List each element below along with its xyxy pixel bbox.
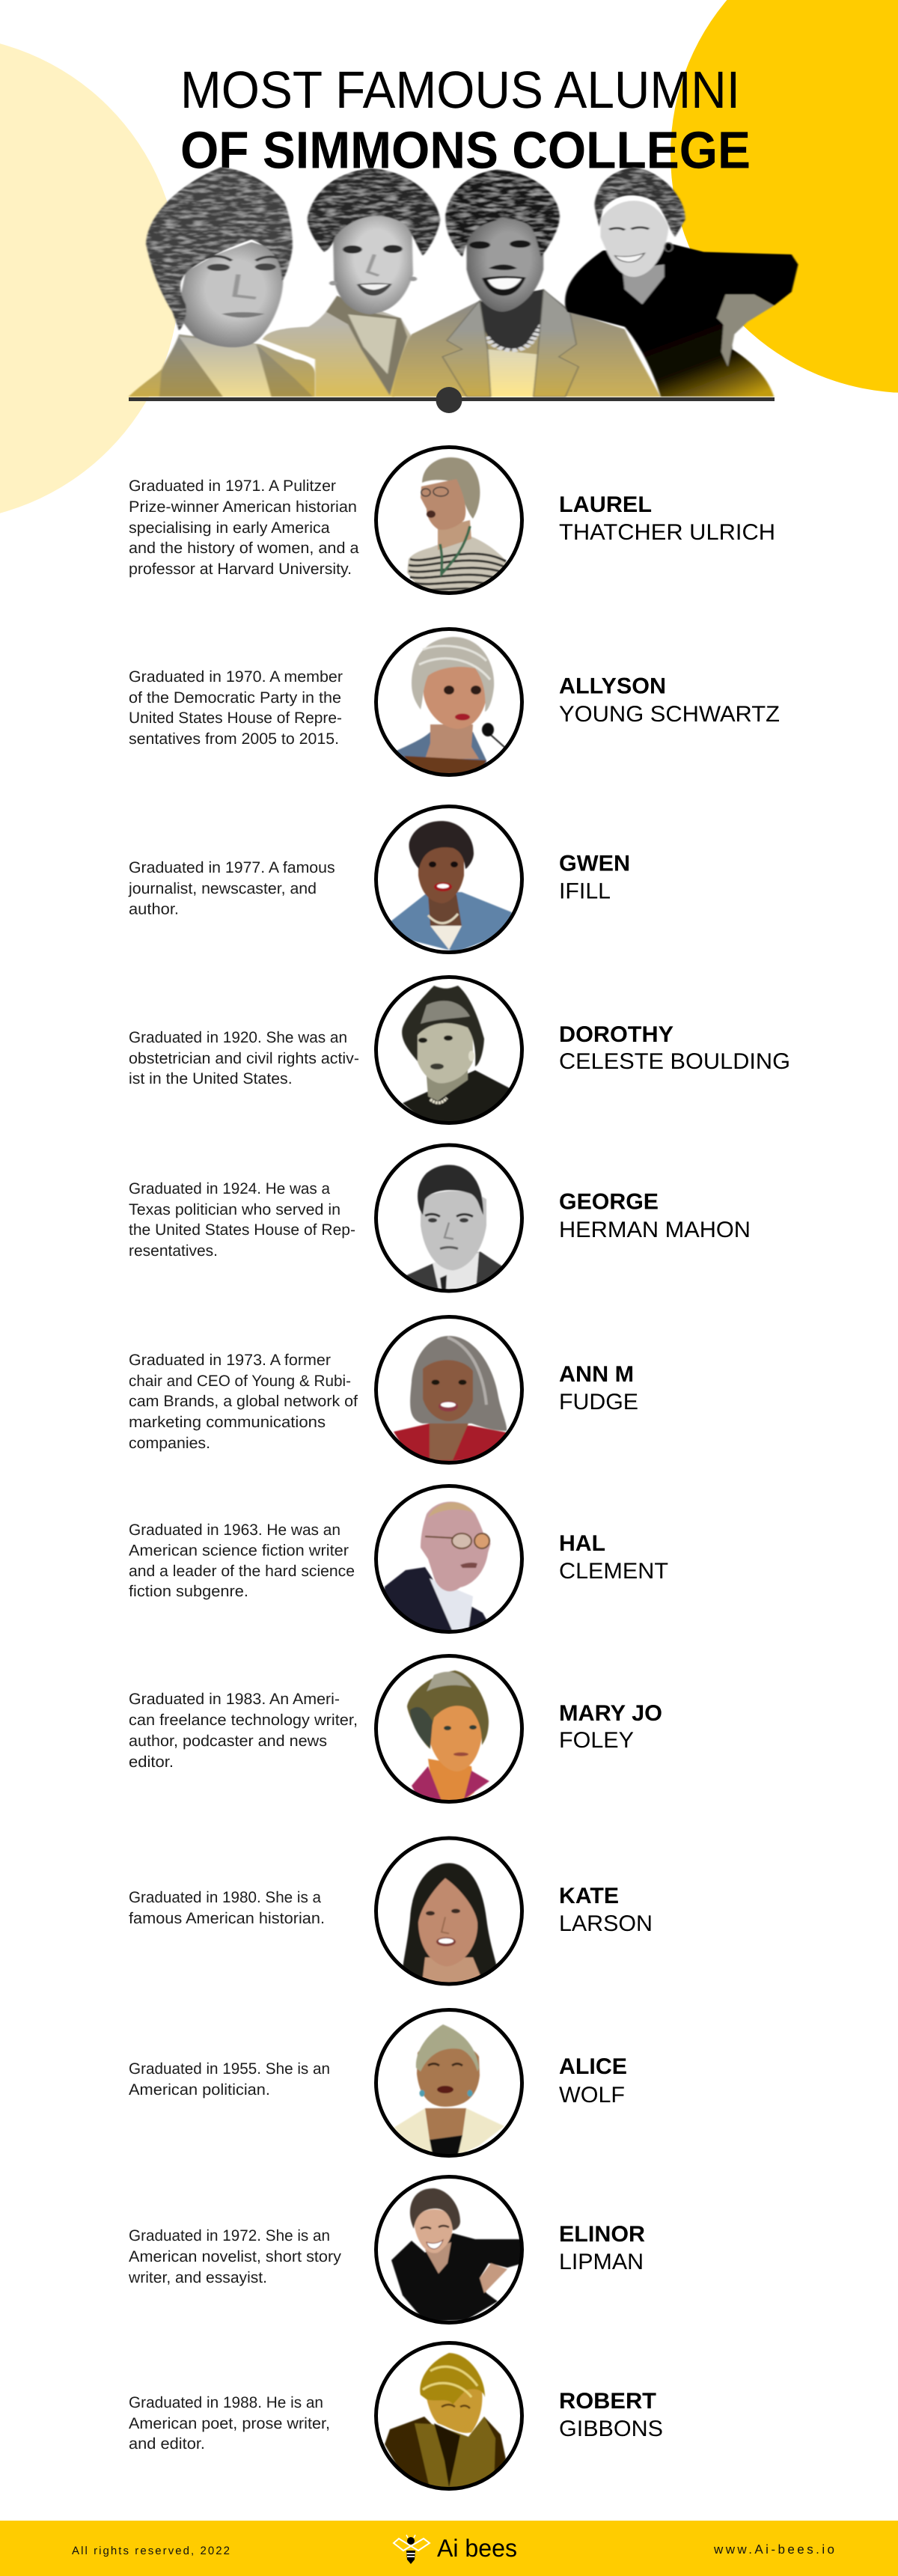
name: MARY JO bbox=[559, 1701, 662, 1726]
description bbox=[129, 2394, 330, 2453]
description bbox=[129, 477, 359, 578]
name bbox=[559, 852, 630, 904]
description: obstetrician and civil rights activ- bbox=[129, 1050, 359, 1067]
name bbox=[559, 2389, 663, 2441]
row: Dorothy Celeste Boulding bbox=[129, 977, 790, 1123]
portrait bbox=[376, 977, 522, 1123]
name bbox=[559, 1022, 790, 1074]
name: ROBERT bbox=[559, 2389, 656, 2414]
description: and editor. bbox=[129, 2435, 205, 2453]
hero baseline rule bbox=[129, 397, 775, 401]
row: Laurel Thatcher Ulrich bbox=[129, 448, 775, 593]
description: and a leader of the hard science bbox=[129, 1563, 355, 1580]
description: Graduated in 1973. A former bbox=[129, 1352, 331, 1369]
name: ELINOR bbox=[559, 2222, 645, 2247]
description: Graduated in 1988. He is an bbox=[129, 2394, 323, 2411]
title: MOST FAMOUS ALUMNI bbox=[180, 61, 740, 119]
description: Graduated in 1972. She is an bbox=[129, 2227, 330, 2244]
description: Texas politician who served in bbox=[129, 1201, 340, 1218]
description: Graduated in 1924. He was a bbox=[129, 1180, 330, 1197]
description: famous American historian. bbox=[129, 1910, 325, 1927]
name: ALICE bbox=[559, 2054, 627, 2079]
portrait bbox=[376, 807, 522, 952]
name: ANN M bbox=[559, 1362, 634, 1387]
description: Graduated in 1983. An Ameri- bbox=[129, 1691, 340, 1708]
name bbox=[559, 674, 780, 727]
description: chair and CEO of Young & Rubi- bbox=[129, 1373, 351, 1390]
name: KATE bbox=[559, 1884, 619, 1908]
description bbox=[129, 668, 343, 748]
description: author, podcaster and news bbox=[129, 1733, 327, 1750]
footer bbox=[0, 2521, 898, 2576]
name: HAL bbox=[559, 1531, 605, 1556]
description bbox=[129, 1889, 325, 1927]
description: Graduated in 1920. She was an bbox=[129, 1029, 347, 1046]
name: YOUNG SCHWARTZ bbox=[559, 702, 780, 727]
portrait bbox=[376, 2176, 523, 2323]
hero portrait: second woman bbox=[263, 168, 440, 397]
portrait bbox=[376, 448, 522, 593]
hero baseline dot bbox=[436, 387, 462, 413]
description: United States House of Repre- bbox=[129, 709, 342, 727]
description: author. bbox=[129, 901, 179, 918]
name: WOLF bbox=[559, 2083, 625, 2108]
portrait bbox=[376, 629, 522, 775]
description: journalist, newscaster, and bbox=[128, 880, 317, 897]
name: CELESTE BOULDING bbox=[559, 1049, 790, 1074]
name: FOLEY bbox=[559, 1728, 634, 1753]
description: the United States House of Rep- bbox=[129, 1221, 355, 1239]
row: Gwen Ifill bbox=[128, 807, 630, 952]
portrait bbox=[376, 1655, 522, 1802]
name: GWEN bbox=[559, 852, 630, 876]
name: LARSON bbox=[559, 1911, 653, 1936]
name: CLEMENT bbox=[559, 1559, 668, 1584]
icon: bee logo bbox=[394, 2535, 430, 2564]
logo wordmark: Ai bees bbox=[437, 2534, 517, 2562]
row: Ann M Fudge bbox=[129, 1317, 638, 1462]
row: Robert Gibbons bbox=[129, 2342, 663, 2489]
description: Graduated in 1970. A member bbox=[129, 668, 343, 686]
name bbox=[559, 2054, 627, 2108]
description: marketing communications bbox=[129, 1414, 326, 1431]
hero portrait: first woman bbox=[129, 167, 315, 397]
name: LAUREL bbox=[559, 492, 652, 517]
copyright: All rights reserved, 2022 bbox=[72, 2545, 230, 2557]
name bbox=[559, 1190, 751, 1242]
description bbox=[129, 2060, 330, 2099]
pale yellow background circle bbox=[0, 35, 180, 522]
description bbox=[129, 1691, 358, 1771]
description: Graduated in 1963. He was an bbox=[129, 1522, 340, 1539]
row: Mary Jo Foley bbox=[129, 1655, 662, 1802]
description: can freelance technology writer, bbox=[129, 1712, 358, 1729]
hero portrait: third woman bbox=[392, 170, 661, 397]
name bbox=[559, 1701, 662, 1753]
description: sentatives from 2005 to 2015. bbox=[129, 730, 339, 748]
row: Elinor Lipman bbox=[128, 2176, 645, 2323]
yellow background circle bbox=[671, 0, 898, 393]
portrait bbox=[376, 1838, 522, 1984]
description: American novelist, short story bbox=[129, 2248, 342, 2265]
description: Graduated in 1977. A famous bbox=[129, 859, 335, 876]
name: GEORGE bbox=[559, 1190, 659, 1215]
hero group portrait bbox=[129, 167, 798, 397]
description bbox=[129, 1180, 355, 1260]
name: HERMAN MAHON bbox=[559, 1218, 751, 1242]
portrait bbox=[376, 1145, 522, 1291]
name bbox=[559, 1531, 668, 1584]
row: Hal Clement bbox=[129, 1486, 668, 1632]
row: Kate Larson bbox=[129, 1838, 653, 1984]
name: FUDGE bbox=[559, 1390, 638, 1414]
name bbox=[559, 2222, 645, 2274]
description bbox=[128, 859, 335, 918]
description bbox=[128, 2227, 342, 2286]
title: OF SIMMONS COLLEGE bbox=[180, 121, 751, 180]
row: George Herman Mahon bbox=[129, 1145, 751, 1291]
row: Allyson Young Schwartz bbox=[129, 629, 780, 775]
description: Graduated in 1955. She is an bbox=[129, 2060, 330, 2078]
description: specialising in early America bbox=[129, 519, 330, 537]
description: Graduated in 1971. A Pulitzer bbox=[129, 477, 336, 495]
description: editor. bbox=[129, 1754, 174, 1771]
description: American science fiction writer bbox=[129, 1542, 349, 1560]
description: resentatives. bbox=[129, 1242, 218, 1260]
description: Graduated in 1980. She is a bbox=[129, 1889, 321, 1906]
description: American politician. bbox=[129, 2081, 270, 2099]
name: IFILL bbox=[559, 879, 611, 904]
description: Prize-winner American historian bbox=[129, 498, 357, 516]
name bbox=[559, 492, 775, 545]
description bbox=[129, 1352, 358, 1452]
portrait bbox=[376, 1486, 522, 1632]
portrait bbox=[376, 2342, 522, 2489]
description: professor at Harvard University. bbox=[129, 561, 352, 578]
name: LIPMAN bbox=[559, 2250, 644, 2274]
description: writer, and essayist. bbox=[128, 2269, 267, 2286]
description: cam Brands, a global network of bbox=[129, 1393, 358, 1410]
portrait bbox=[376, 1317, 522, 1462]
description bbox=[129, 1029, 359, 1087]
hero portrait: fourth woman bbox=[565, 167, 798, 397]
name: DOROTHY bbox=[559, 1022, 674, 1047]
name: THATCHER ULRICH bbox=[559, 520, 775, 545]
description bbox=[129, 1522, 355, 1600]
name bbox=[559, 1362, 638, 1414]
description: fiction subgenre. bbox=[129, 1583, 248, 1600]
description: American poet, prose writer, bbox=[129, 2415, 330, 2432]
description: companies. bbox=[129, 1435, 210, 1452]
row: Alice Wolf bbox=[129, 2010, 627, 2155]
website: www.Ai-bees.io bbox=[713, 2542, 834, 2557]
name: GIBBONS bbox=[559, 2417, 663, 2441]
name bbox=[559, 1884, 653, 1936]
description: of the Democratic Party in the bbox=[129, 689, 341, 706]
name: ALLYSON bbox=[559, 674, 666, 698]
description: and the history of women, and a bbox=[129, 540, 359, 557]
title bbox=[180, 61, 751, 180]
description: ist in the United States. bbox=[129, 1070, 293, 1087]
portrait bbox=[376, 2010, 522, 2155]
